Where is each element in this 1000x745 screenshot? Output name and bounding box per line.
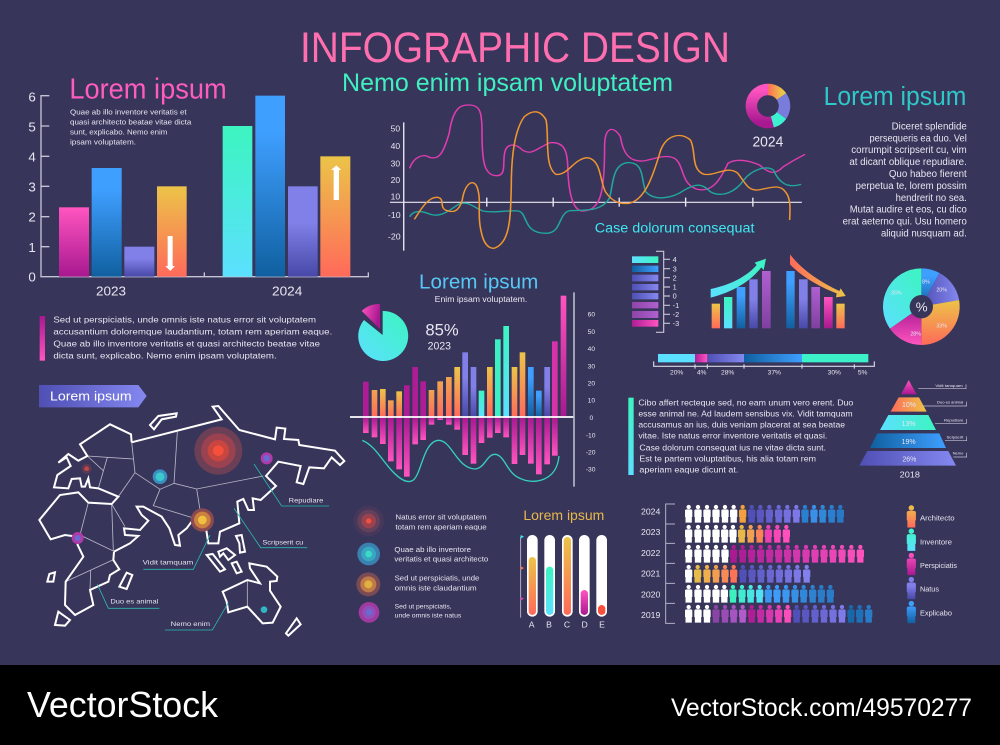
text block: paragraph: accusantium doloremque laudantium, totam rem aperiam eaque.: [53, 327, 332, 337]
scale labels: 1: [673, 283, 677, 292]
donut label: 2024: [752, 134, 783, 150]
year labels: 2022: [641, 548, 661, 558]
year labels: [641, 506, 661, 620]
pyramid labels: Vidit tamquam: [935, 384, 963, 388]
text block: right aligned paragraph: corrumpit scripserit cu, vim: [851, 145, 967, 156]
text block: right aligned paragraph: persequeris ea duo. Vel: [870, 133, 967, 144]
arrow: up: [331, 165, 341, 200]
legend text: purple: [395, 604, 461, 619]
stacked bar labels: 28%: [721, 370, 734, 377]
scale labels: -1: [673, 301, 679, 310]
people legend: Inventore: [907, 529, 952, 551]
pyramid chart: 26%: [902, 457, 916, 464]
text block: paragraph: Est te partem voluptatibus, his alia totam rem: [639, 453, 816, 463]
text block: right aligned paragraph: erat aeterno qui. Usu homero: [843, 216, 967, 227]
year labels: 2019: [641, 610, 661, 620]
hotspot: orange: [191, 508, 214, 532]
right axis labels: 10: [588, 398, 595, 405]
callout labels: [110, 498, 324, 628]
hotspot: purple: [261, 452, 273, 464]
text block: right aligned paragraph: Quo habeo fierent: [889, 169, 967, 180]
panel: hotspot legend and capsule chart: [353, 506, 607, 630]
scale labels: -2: [673, 310, 679, 319]
year labels: 2020: [641, 589, 661, 599]
panel: bar chart 2023 vs 2024: [28, 73, 368, 361]
scale labels: 4: [673, 255, 677, 264]
negative bars: [363, 417, 558, 477]
scale bracket: [656, 251, 670, 332]
hotspot: red small: [82, 464, 92, 474]
right axis labels: -20: [586, 449, 596, 456]
axis labels: 50: [391, 124, 400, 134]
text block: bar chart description: [70, 107, 192, 146]
text block: paragraph: Cibo affert recteque sed, no eam unum vero erent. Duo: [638, 397, 854, 407]
pyramid labels: Repudiare: [944, 419, 963, 423]
people legend: Inventore: Inventore: [920, 537, 952, 546]
heading: Lorem ipsum teal: Lorem ipsum: [824, 82, 966, 111]
people legend: Natus: [907, 577, 939, 599]
rising bars: [712, 271, 771, 328]
donut chart 2024: [751, 89, 785, 122]
hotspot: blue: [153, 469, 167, 484]
line: pink: [410, 105, 805, 211]
text block: right aligned paragraph: at dicant oblique repudiare.: [849, 157, 967, 168]
pie chart percent: 20%: [936, 288, 947, 294]
legend icon: red: [353, 506, 384, 536]
text block: paragraph: accusamus an ius, duis veniam placerat at sea beatae: [638, 420, 845, 430]
line: orange: [414, 112, 790, 248]
hotspot: teal: [261, 606, 267, 613]
axis labels: -20: [388, 232, 401, 242]
legend icon: orange: [356, 572, 380, 596]
text block: paragraph: Sed ut perspiciatis, unde omnis iste natus error sit voluptatem: [53, 315, 316, 325]
capsule letters: [529, 620, 605, 630]
callout labels: Repudiare: [289, 498, 324, 505]
legend text: red: totam rem aperiam eaque: [395, 522, 487, 531]
pyramid chart: 19%: [902, 439, 916, 446]
capsule tracks: [527, 535, 607, 617]
zero line: [350, 414, 574, 419]
banner: [39, 385, 147, 407]
scale labels: [673, 255, 679, 328]
right axis labels: 40: [588, 346, 595, 353]
pyramid labels: Sclpserit: [947, 436, 963, 440]
axis labels: -10: [388, 211, 401, 221]
pyramid leader lines: [918, 384, 967, 457]
axis labels: 40: [391, 142, 400, 152]
footer bar: [0, 665, 1000, 745]
axis labels: 10: [391, 192, 400, 202]
stacked bar labels: 30%: [828, 370, 841, 377]
legend text: orange: [395, 574, 479, 592]
legend icon: purple: [359, 602, 379, 623]
legend text: orange: Sed ut perspiciatis, unde: [395, 574, 479, 583]
map outlines: [39, 406, 344, 636]
capsule letters: A: [529, 620, 535, 630]
axes: [41, 96, 368, 277]
pie chart percent: 28%: [910, 331, 921, 337]
year labels: 2024: [641, 506, 661, 516]
row 2019: [685, 605, 872, 623]
axes: [390, 122, 802, 251]
accent bar: [40, 316, 45, 361]
text block: paragraph: aperiam eaque dicunt at.: [639, 464, 738, 474]
scale labels: 0: [673, 292, 677, 301]
pie chart percent: 35%: [891, 291, 902, 297]
callout labels: Scripserit cu: [262, 539, 304, 546]
right axis labels: 20: [588, 381, 595, 388]
callout lines: [97, 464, 329, 630]
row 2023: [685, 525, 790, 543]
footer url: VectorStock.com/49570277: [671, 694, 972, 722]
axis labels: 2: [28, 210, 36, 225]
pie value: 85%: [425, 320, 459, 339]
callout labels: Duo es animal: [110, 598, 159, 605]
footer brand: VectorStock: [27, 684, 219, 725]
text block: right aligned paragraph: aliquid nusquam ad.: [881, 228, 967, 239]
capsule fills: [529, 537, 605, 615]
text block: paragraph: Case dolorum consequat ius ne vitae dicta sunt.: [639, 442, 826, 452]
people legend: Explicabo: Explicabo: [920, 608, 952, 617]
axis labels: 1: [28, 240, 36, 255]
text block: right aligned paragraph: perpetua te, lorem possim: [856, 181, 967, 192]
hotspot: purple west: [72, 532, 84, 544]
legend text: blue: [394, 545, 488, 564]
capsule letters: B: [546, 620, 552, 630]
banner label: Lorem ipsum: [50, 390, 132, 404]
callout labels: Vidit tamquam: [143, 559, 194, 566]
stacked percent bar: [654, 354, 874, 369]
scale labels: 3: [673, 264, 677, 273]
bars 2024: [223, 96, 350, 277]
text block: right aligned paragraph: Mutat audire et eos, cu dico: [850, 204, 967, 215]
pyramid chart: 10%: [902, 402, 916, 409]
legend icon: blue: [357, 543, 380, 565]
axis labels: 2023: [96, 283, 126, 298]
legend text: red: [395, 513, 487, 531]
heading: Lorem ipsum gold: Lorem ipsum: [523, 508, 604, 523]
scale labels: -3: [673, 319, 679, 328]
title: INFOGRAPHIC DESIGN: [300, 24, 730, 72]
pie year: 2023: [428, 340, 451, 352]
people legend: Architecto: [907, 505, 955, 527]
legend text: purple: unde omnis iste natus: [395, 612, 461, 619]
right axis: [571, 292, 576, 487]
pie chart percent: %: [916, 300, 928, 315]
map borders: [66, 432, 263, 607]
text block: bar chart description: ipsam voluptatem.: [70, 137, 136, 146]
panel: line chart: [388, 82, 967, 251]
heading: Lorem ipsum pink: Lorem ipsum: [69, 73, 227, 105]
teal curve: [362, 440, 559, 481]
text block: paragraph: [638, 397, 854, 474]
line: teal: [410, 163, 801, 233]
legend text: blue: Quae ab illo inventore: [394, 545, 471, 554]
bracket axis: [666, 504, 675, 623]
right axis labels: [586, 312, 596, 474]
axis labels: [388, 124, 401, 242]
axis labels: 20: [391, 176, 400, 186]
accent bar: [628, 398, 634, 475]
legend text: blue: veritatis et quasi architecto: [394, 555, 488, 564]
pyramid labels: Nemo: [953, 451, 963, 455]
chart caption: Case dolorum consequat: [595, 221, 755, 236]
callout labels: Nemo enim: [171, 621, 211, 628]
panel: people chart: [641, 504, 957, 623]
right axis labels: 30: [588, 363, 595, 370]
subheading: Enim ipsam voluptatem.: [435, 295, 527, 304]
right axis labels: 50: [588, 329, 595, 336]
pyramid chart: [859, 380, 956, 466]
text block: paragraph: [53, 315, 332, 361]
pie chart 85%: [358, 304, 408, 361]
text block: paragraph: Quae ab illo inventore veritatis et quasi architecto beatae vitae: [53, 339, 320, 349]
panel: center diverging bar chart: [350, 271, 596, 487]
right axis labels: -10: [586, 432, 596, 439]
legend text: purple: Sed ut perspiciatis,: [395, 604, 452, 611]
stacked legend scale: [632, 256, 658, 327]
arrow: falling: [790, 254, 846, 297]
people legend: Explicabo: [907, 601, 952, 623]
arrow: down: [165, 236, 175, 271]
text block: paragraph: dicta sunt, explicabo. Nemo enim ipsam voluptatem.: [53, 351, 277, 361]
text block: paragraph: vitae. Iste natus error inventore veritatis et quasi.: [638, 431, 827, 441]
pie chart percent: 33%: [936, 324, 947, 330]
falling bars: [786, 271, 845, 328]
row 2022: [685, 545, 864, 563]
text block: right aligned paragraph: [843, 121, 967, 239]
stacked bar labels: [670, 370, 868, 377]
year labels: 2021: [641, 569, 661, 579]
right axis labels: 60: [588, 312, 595, 319]
right axis labels: -30: [586, 467, 596, 474]
arrow: rising: [711, 259, 766, 298]
text block: bar chart description: sunt, explicabo. Nemo enim: [70, 127, 167, 136]
axis labels: 6: [28, 89, 36, 104]
pyramid labels: [935, 384, 964, 455]
people legend: Natus: Natus: [920, 585, 939, 594]
pyramid year: 2018: [900, 469, 920, 479]
text block: paragraph: esse animal ne. Ad laudem sensibus vix. Vidit tamquam: [638, 408, 853, 418]
people legend: Architecto: Architecto: [920, 513, 955, 522]
heading: Lorem ipsum blue: Lorem ipsum: [419, 271, 538, 293]
axis labels: 2024: [272, 283, 303, 298]
text block: bar chart description: quasi architecto beatae vitae dicta: [70, 117, 192, 126]
year labels: 2023: [641, 527, 661, 537]
pyramid labels: Duo es animal: [937, 401, 964, 405]
text block: right aligned paragraph: Diceret splendide: [892, 121, 967, 132]
pie chart percent: [883, 268, 960, 345]
capsule letters: D: [582, 620, 588, 630]
legend text: orange: omnis iste claudantium: [395, 583, 477, 592]
row 2021: [685, 565, 810, 583]
row 2020: [685, 585, 834, 603]
capsule chart axis: [521, 535, 524, 618]
row 2024: [685, 505, 844, 523]
pyramid chart: 13%: [902, 421, 916, 428]
subtitle: Nemo enim ipsam voluptatem: [342, 69, 673, 97]
stacked bar labels: 4%: [697, 370, 707, 377]
stacked bar labels: 20%: [670, 370, 683, 377]
people legend: Perspiciatis: Perspiciatis: [920, 561, 957, 570]
capsule letters: C: [564, 620, 570, 630]
people legend: Perspiciatis: [907, 553, 957, 575]
panel: right charts: [628, 251, 967, 479]
capsule letters: E: [599, 620, 605, 630]
legend text: red: Natus error sit voluptatem: [395, 513, 487, 522]
axis labels: 30: [391, 159, 400, 169]
stacked bar labels: 37%: [768, 370, 781, 377]
axis labels: [28, 89, 303, 298]
scale labels: 2: [673, 273, 677, 282]
right axis labels: 0: [589, 415, 593, 422]
hotspot: red large: [194, 427, 242, 475]
text block: bar chart description: Quae ab illo inventore veritatis et: [70, 107, 187, 116]
positive bars: [363, 296, 566, 417]
text block: right aligned paragraph: hendrerit no sea.: [896, 193, 967, 204]
axis labels: 3: [28, 180, 36, 195]
bars 2023: [59, 168, 187, 277]
panel: world map: [39, 385, 344, 636]
axis labels: 5: [28, 120, 36, 135]
pie chart percent: 8%: [922, 280, 930, 286]
axis labels: 4: [28, 150, 36, 165]
axis labels: 0: [28, 270, 36, 285]
stacked bar labels: 5%: [858, 370, 868, 377]
